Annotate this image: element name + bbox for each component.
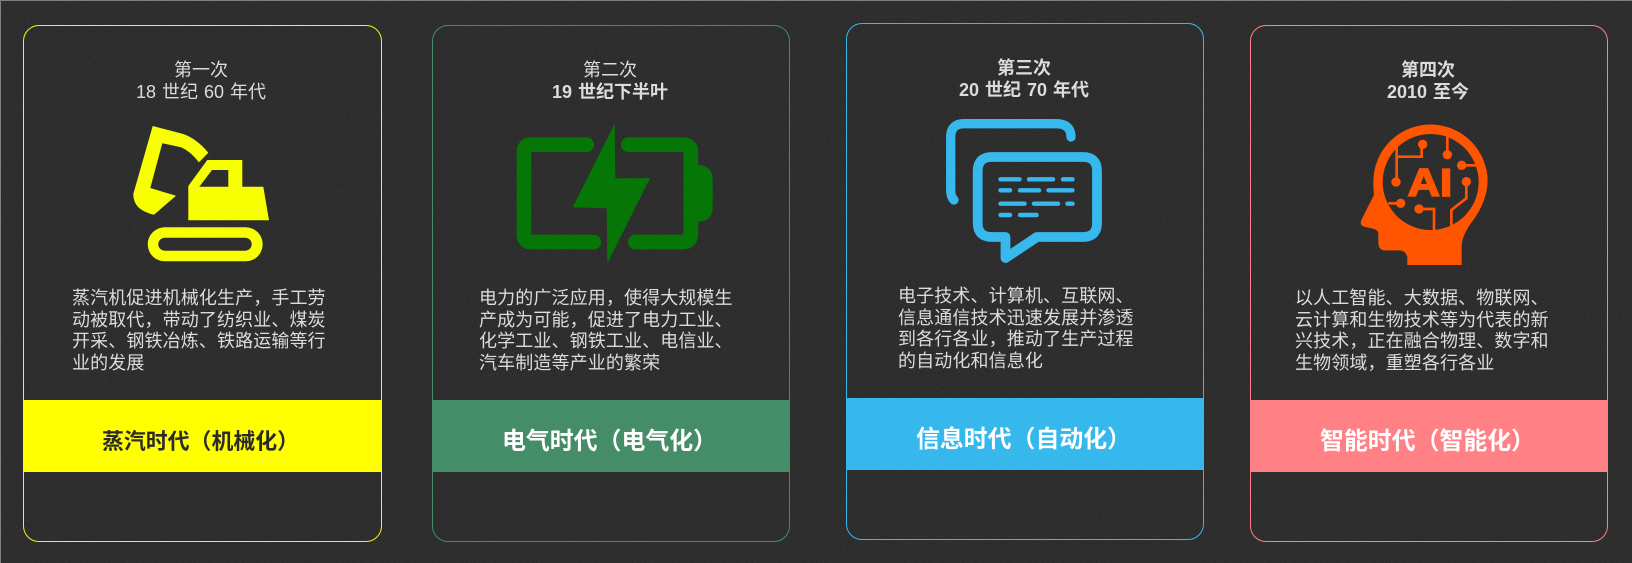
text: second revolution description: 汽车制造等产业的繁荣 <box>479 353 660 373</box>
text: second revolution description: 产成为可能，促进了电力工业、 <box>479 310 733 330</box>
icon: chat bubbles <box>946 119 1102 263</box>
banner: intelligent age: 智能时代（智能化） <box>1320 428 1535 455</box>
icon: excavator <box>133 126 269 262</box>
text: second revolution description: 电力的广泛应用，使得大规模生 <box>479 288 733 308</box>
heading: fourth revolution date <box>1387 60 1469 102</box>
icon: AI head: AI <box>1408 162 1452 205</box>
icon: AI head <box>1360 124 1488 265</box>
heading: first revolution date: 第一次 <box>174 60 228 80</box>
panel: third revolution <box>846 23 1204 540</box>
heading: third revolution date: 第三次 <box>997 58 1051 78</box>
text: second revolution description: 化学工业、钢铁工业、电信业、 <box>479 331 733 351</box>
banner: steam age <box>23 400 382 472</box>
text: first revolution description: 动被取代，带动了纺织业、煤炭 <box>72 310 326 330</box>
panel: second revolution <box>432 25 790 542</box>
heading: first revolution date <box>136 60 266 102</box>
text: third revolution description: 到各行各业，推动了生产过程 <box>898 329 1134 349</box>
text: fourth revolution description: 以人工智能、大数据、物联网、 <box>1295 288 1549 308</box>
text: third revolution description: 电子技术、计算机、互联网、 <box>898 286 1134 306</box>
text: first revolution description <box>72 288 326 373</box>
banner: information age <box>846 398 1204 470</box>
heading: second revolution date: 19 世纪下半叶 <box>552 82 668 102</box>
heading: fourth revolution date: 2010 至今 <box>1387 82 1469 102</box>
heading: second revolution date: 第二次 <box>583 60 637 80</box>
text: second revolution description <box>479 288 733 373</box>
text: fourth revolution description: 云计算和生物技术等为代表的新 <box>1295 310 1549 330</box>
icon: battery with lightning bolt <box>516 124 713 263</box>
banner: electrical age: 电气时代（电气化） <box>502 428 717 455</box>
text: fourth revolution description: 兴技术，正在融合物理、数字和 <box>1295 331 1549 351</box>
banner: information age: 信息时代（自动化） <box>916 426 1131 453</box>
banner: electrical age <box>432 400 790 472</box>
banner: steam age: 蒸汽时代（机械化） <box>102 429 299 454</box>
heading: third revolution date: 20 世纪 70 年代 <box>959 80 1089 100</box>
text: third revolution description: 信息通信技术迅速发展并渗透 <box>898 308 1134 328</box>
banner: intelligent age <box>1250 400 1608 472</box>
heading: first revolution date: 18 世纪 60 年代 <box>136 82 266 102</box>
panel: first revolution <box>23 25 382 542</box>
text: fourth revolution description <box>1295 288 1549 373</box>
text: first revolution description: 业的发展 <box>72 353 144 373</box>
text: first revolution description: 蒸汽机促进机械化生产，手工劳 <box>72 288 326 308</box>
panel: fourth revolution <box>1250 25 1608 542</box>
heading: third revolution date <box>959 58 1089 100</box>
text: third revolution description <box>898 286 1134 371</box>
text: fourth revolution description: 生物领域，重塑各行各业 <box>1295 353 1494 373</box>
text: first revolution description: 开采、钢铁冶炼、铁路运输等行 <box>72 331 326 351</box>
heading: second revolution date <box>552 60 668 102</box>
text: third revolution description: 的自动化和信息化 <box>898 351 1043 371</box>
heading: fourth revolution date: 第四次 <box>1401 60 1455 80</box>
